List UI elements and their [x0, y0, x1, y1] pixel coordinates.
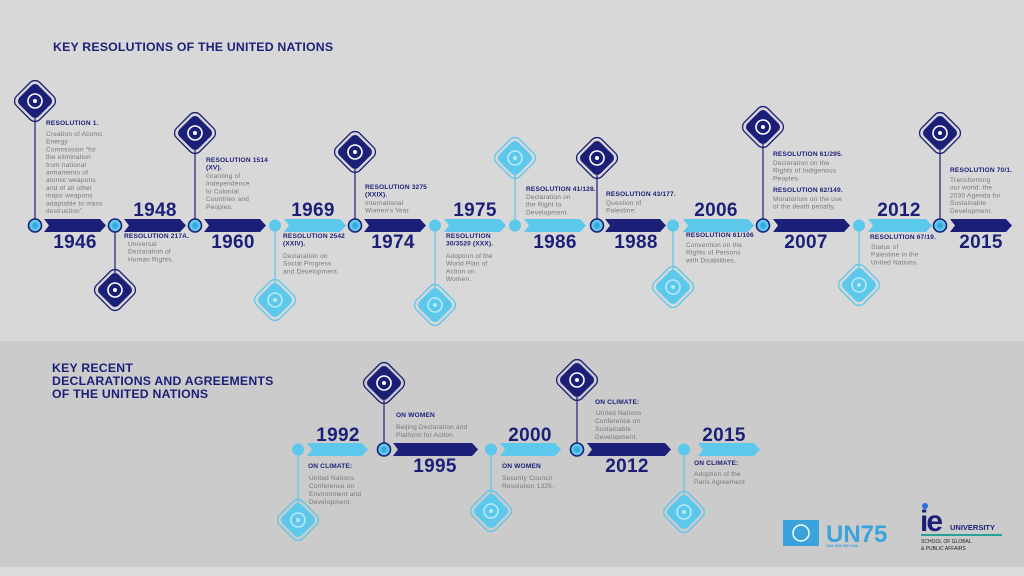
text: resolution 43/177 [606, 191, 676, 215]
years: 1975 [453, 200, 497, 221]
text: resolutions 61/295 and 62/149: Rights of Indigenous [773, 168, 837, 175]
text: resolution 1514: Granting of [206, 173, 240, 180]
text: resolution 217A: Universal [128, 241, 157, 248]
text: resolution 70/1: 2030 Agenda for [950, 192, 1001, 199]
text: resolution 1: RESOLUTION 1. [46, 120, 99, 127]
text: 2015 on climate: Adoption of the [694, 471, 741, 478]
text: resolutions 61/295 and 62/149 [773, 151, 843, 211]
text: 1992 on climate: United Nations [309, 475, 355, 482]
text: resolution 3275: International [365, 200, 404, 207]
icon: crown 2000 [468, 488, 514, 534]
text: resolution 2542: Declaration on [283, 253, 328, 260]
text: resolution 41/128: RESOLUTION 41/128. [526, 186, 596, 193]
text: resolution 3275 [365, 184, 427, 215]
title: key recent declarations: OF THE UNITED NATIONS [52, 387, 208, 401]
text: resolution 43/177: Question of [606, 200, 641, 207]
text: 1995 on women: ON WOMEN [396, 412, 435, 419]
logo: UN75: UN75 [826, 521, 887, 548]
text: resolution 1514 [206, 157, 268, 211]
text: resolution 43/177: RESOLUTION 43/177. [606, 191, 676, 198]
text: resolution 30/3520 [446, 233, 493, 283]
connector lines [35, 118, 940, 288]
years [53, 200, 1003, 253]
icon: network 1969 [252, 277, 298, 323]
text: resolution 70/1: RESOLUTION 70/1. [950, 167, 1012, 174]
text: 2000 on women: Resolution 1325. [502, 483, 554, 490]
text: resolution 41/128 [526, 186, 596, 216]
text: 1995 on women: Platform for Action. [396, 432, 455, 439]
text: resolution 61/106: Convention on the [686, 242, 742, 249]
text: 1992 on climate: Environment and [309, 491, 361, 498]
icon: climate 1992 [275, 497, 321, 543]
text: resolution 3275: Women's Year [365, 208, 410, 215]
text: resolution 70/1 [950, 167, 1012, 215]
icon: pin 2012 [836, 262, 882, 308]
text: 1992 on climate: Development. [309, 499, 352, 506]
text: 2000 on women: ON WOMEN [502, 463, 541, 470]
text: resolution 43/177: Palestine. [606, 208, 637, 215]
text: resolution 41/128: Declaration on [526, 194, 571, 201]
text: resolution 1: atomic weapons [46, 177, 96, 184]
text: 2012 on climate: Sustainable [595, 426, 631, 433]
timeline: recent declarations [292, 397, 760, 503]
timeline: recent declarations: 1992 [316, 425, 360, 446]
text: resolution 1: destruction”. [46, 208, 84, 215]
timeline: key resolutions [28, 118, 1012, 288]
text: resolutions 61/295 and 62/149: of the death penalty. [773, 204, 836, 211]
text: resolution 2542: and Development. [283, 268, 339, 275]
logo: IE University: ie [920, 505, 942, 538]
text: resolution 2542 [283, 233, 345, 275]
text: 1992 on climate: ON CLIMATE: [308, 463, 352, 470]
text: resolution 70/1: Sustainable [950, 200, 986, 207]
text: resolution 3275: RESOLUTION 3275 [365, 184, 427, 191]
icon: pin 1988 [574, 135, 620, 181]
text: resolution 2542: (XXIV). [283, 240, 305, 248]
text: resolutions 61/295 and 62/149: Declaration on the [773, 160, 830, 167]
text: resolution 1514: Independence [206, 181, 250, 188]
years: 1988 [614, 232, 658, 253]
logo: IE University: UNIVERSITY [950, 523, 995, 532]
text: resolution 41/128: the Right to [526, 202, 562, 209]
text: resolution 1: armaments of [46, 170, 88, 176]
text: 2015 on climate [694, 460, 745, 486]
text: resolution 30/3520: World Plan of [446, 261, 488, 268]
title: key recent declarations: DECLARATIONS AND AGREEMENTS [52, 374, 274, 388]
text: resolution 2542: RESOLUTION 2542 [283, 233, 345, 240]
text: 2012 on climate: ON CLIMATE: [595, 399, 639, 406]
text: resolution 61/106: RESOLUTION 61/106 [686, 232, 754, 239]
timeline: recent declarations: 2015 [702, 425, 746, 446]
text: resolution 30/3520: Women. [446, 276, 471, 283]
text: 2012 on climate: Development. [595, 434, 638, 441]
icon: leaf 2015 [917, 110, 963, 156]
text: resolution 30/3520: Adoption of the [446, 253, 493, 260]
years: 1974 [371, 232, 415, 253]
years: 2012 [877, 200, 921, 221]
icon: pagoda 1995 [361, 360, 407, 406]
logo: IE University: SCHOOL OF GLOBAL [921, 539, 972, 545]
title: key recent declarations: KEY RECENT [52, 361, 133, 375]
text: resolution 67/19: RESOLUTION 67/19. [870, 234, 936, 241]
text: 2012 on climate [595, 399, 642, 441]
text: resolution 67/19 [870, 234, 936, 266]
text: 2000 on women [502, 463, 554, 490]
text: resolution 70/1: our world: the [950, 185, 992, 192]
text: resolution 41/128: Development. [526, 209, 569, 216]
text: resolution 1: major weapons [46, 193, 93, 200]
icon: gear 1986 [492, 135, 538, 181]
text: resolution 1: the elimination [46, 154, 91, 161]
icon: target 2007 [740, 104, 786, 150]
icon: wheelchair 2006 [650, 264, 696, 310]
logo: IE University: & PUBLIC AFFAIRS [921, 546, 966, 552]
text: resolution 30/3520: Action on [446, 268, 475, 275]
years: 2007 [784, 232, 828, 253]
text: 2015 on climate: Paris Agreement [694, 479, 745, 486]
years: 2006 [694, 200, 738, 221]
text: resolution 1514: Peoples. [206, 204, 233, 211]
text: resolution 1: from national [46, 162, 87, 169]
text: resolution 30/3520: 30/3520 (XXX). [446, 240, 493, 248]
text: resolution 1: adaptable to mass [46, 200, 103, 207]
logo: IE University [920, 503, 1002, 552]
icon: atom 1946 [12, 78, 58, 124]
circles [28, 219, 42, 232]
text: resolution 1514: to Colonial [206, 188, 239, 195]
text: resolution 1: Commission “for [46, 146, 97, 153]
timeline: recent declarations: 2012 [605, 456, 649, 477]
years: 1969 [291, 200, 335, 221]
text: resolution 61/106: Rights of Persons [686, 250, 741, 257]
years: 1986 [533, 232, 577, 253]
text: resolutions 61/295 and 62/149: RESOLUTION 61/295. [773, 151, 843, 158]
years: 1960 [211, 232, 255, 253]
icon: eiffel 2015 [661, 489, 707, 535]
text: 1992 on climate: Conference on [309, 483, 354, 490]
text: resolution 217A: RESOLUTION 217A. [124, 233, 189, 240]
text: resolution 67/19: Status of [871, 244, 898, 251]
text: 2012 on climate: Conference on [595, 418, 640, 425]
text: resolution 67/19: Palestine in the [871, 252, 919, 259]
text: resolution 61/106 [685, 232, 754, 264]
icon: leaf 2012 [554, 357, 600, 403]
text: resolution 217A: Declaration of [128, 249, 171, 256]
text: resolution 217A: Human Rights. [128, 256, 174, 263]
text: resolution 30/3520: RESOLUTION [446, 233, 491, 240]
text: 1995 on women: Beijing Declaration and [396, 424, 468, 431]
title: key resolutions: KEY RESOLUTIONS OF THE UNITED NATIONS [53, 40, 333, 54]
text: resolution 70/1: Development. [950, 208, 993, 215]
text: resolution 1: Energy [46, 139, 68, 146]
text: resolution 61/106: with Disabilities. [685, 257, 736, 264]
text: resolution 67/19: United Nations. [871, 259, 918, 266]
icon: venus 1974 [332, 129, 378, 175]
text: resolution 1 [46, 120, 103, 215]
timeline: recent declarations: 1995 [413, 456, 457, 477]
timeline: recent declarations: 2000 [508, 425, 552, 446]
text: 1995 on women [396, 412, 468, 439]
text: resolution 1514: (XV). [206, 164, 222, 172]
text: resolution 217A [124, 233, 189, 263]
text: resolution 1: Creation of Atomic [46, 131, 103, 138]
text: resolutions 61/295 and 62/149: Peoples. [773, 175, 800, 182]
icon: people 1975 [412, 282, 458, 328]
text: resolutions 61/295 and 62/149: Moratorium on the use [773, 196, 842, 203]
text: resolution 2542: Social Progress [283, 261, 332, 268]
text: resolution 1: and of all other [46, 185, 93, 192]
bottom panel background [0, 341, 1024, 567]
text: resolution 1514: Countries and [206, 196, 249, 203]
logo: UN75 [783, 520, 887, 548]
years: 2015 [959, 232, 1003, 253]
arrows [44, 219, 1012, 232]
text: resolution 1514: RESOLUTION 1514 [206, 157, 268, 164]
text: 1992 on climate [308, 463, 361, 506]
text: resolution 3275: (XXIX). [365, 192, 387, 198]
text: resolutions 61/295 and 62/149: RESOLUTION 62/149. [773, 187, 843, 194]
text: resolution 70/1: Transforming [950, 177, 991, 184]
years: 1948 [133, 200, 177, 221]
text: 2012 on climate: United Nations [596, 410, 642, 417]
icon: eagle 1960 [172, 110, 218, 156]
years: 1946 [53, 232, 97, 253]
text: 2015 on climate: ON CLIMATE: [694, 460, 738, 467]
text: 2000 on women: Security Council [502, 475, 553, 482]
logo: UN75: 2030 AND BEYOND [826, 544, 859, 548]
icon: scales 1948 [92, 267, 138, 313]
